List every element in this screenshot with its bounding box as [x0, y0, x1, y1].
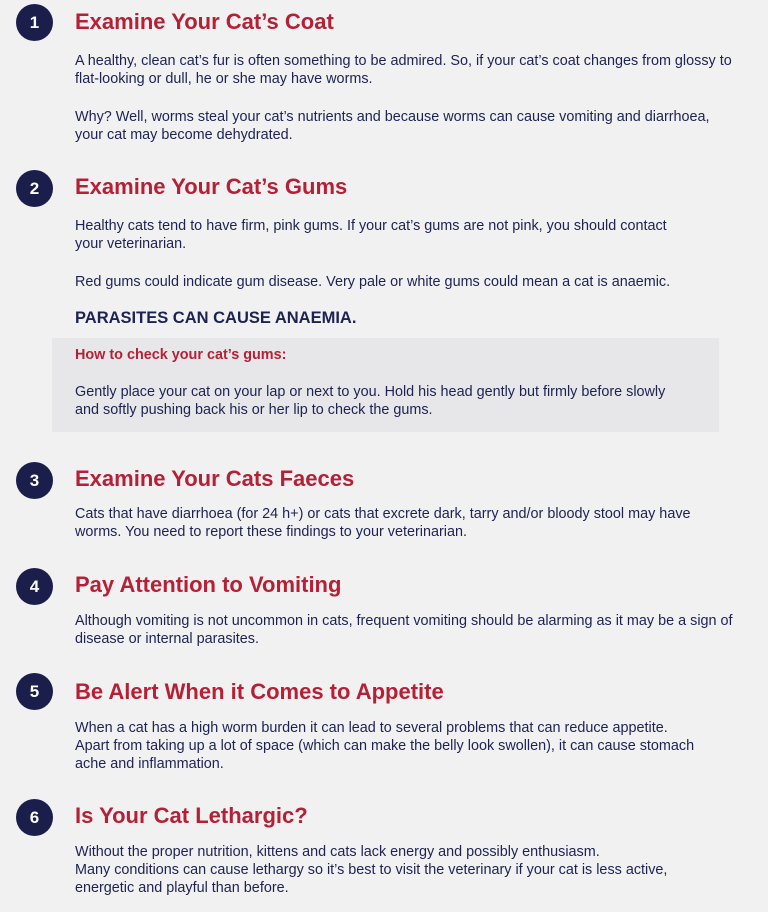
text 6: Many conditions can cause lethargy so it’s best to visit the veterinary if your cat is less active, [75, 862, 667, 878]
section 1 [16, 4, 732, 143]
text 1b: your cat may become dehydrated. [75, 127, 293, 143]
text 2b: Red gums could indicate gum disease. Very pale or white gums could mean a cat is anaemic. [75, 274, 670, 290]
icon: number 3 [16, 462, 53, 499]
icon: number 4: 4 [30, 577, 39, 596]
section 4 [16, 568, 733, 647]
heading 3: Examine Your Cats Faeces [75, 466, 354, 491]
icon: number 3: 3 [30, 471, 39, 490]
heading 6: Is Your Cat Lethargic? [75, 803, 308, 828]
text 2a [75, 218, 667, 252]
panel: how to check gums [52, 338, 719, 432]
box text [75, 384, 666, 418]
icon: number 5: 5 [30, 682, 39, 701]
icon: number 1 [16, 4, 53, 41]
text 3 [75, 506, 691, 540]
text 5 [75, 720, 694, 772]
icon: number 4 [16, 568, 53, 605]
box heading: How to check your cat’s gums: [75, 347, 286, 363]
icon: number 2: 2 [30, 179, 39, 198]
text 1a: A healthy, clean cat’s fur is often something to be admired. So, if your cat’s coat changes from glossy to [75, 53, 732, 69]
heading 5: Be Alert When it Comes to Appetite [75, 679, 444, 704]
icon: number 5 [16, 673, 53, 710]
text 1b: Why? Well, worms steal your cat’s nutrients and because worms can cause vomiting and diarrhoea, [75, 109, 710, 125]
text 2a: Healthy cats tend to have firm, pink gums. If your cat’s gums are not pink, you should contact [75, 218, 667, 234]
text 4: Although vomiting is not uncommon in cats, frequent vomiting should be alarming as it may be a sign of [75, 613, 733, 629]
section 5 [16, 673, 694, 772]
section 6 [16, 799, 667, 896]
text 4: disease or internal parasites. [75, 631, 259, 647]
icon: number 6 [16, 799, 53, 836]
text 1a [75, 53, 732, 87]
text 1b [75, 109, 710, 143]
section 2 [16, 170, 719, 432]
text 3: Cats that have diarrhoea (for 24 h+) or cats that excrete dark, tarry and/or bloody stool may have [75, 506, 691, 522]
box text: Gently place your cat on your lap or next to you. Hold his head gently but firmly before slowly [75, 384, 665, 400]
text 3: worms. You need to report these findings to your veterinarian. [75, 524, 467, 540]
text 4 [75, 613, 733, 647]
text 6: Without the proper nutrition, kittens and cats lack energy and possibly enthusiasm. [75, 844, 600, 860]
icon: number 2 [16, 170, 53, 207]
text 6: energetic and playful than before. [75, 880, 289, 896]
text 2a: your veterinarian. [75, 236, 186, 252]
box text: and softly pushing back his or her lip to check the gums. [75, 402, 433, 418]
heading 4: Pay Attention to Vomiting [75, 572, 341, 597]
text 5: Apart from taking up a lot of space (which can make the belly look swollen), it can cause stomach [75, 738, 694, 754]
text 6 [75, 844, 667, 896]
text 5: When a cat has a high worm burden it can lead to several problems that can reduce appetite. [75, 720, 668, 736]
section 3 [16, 462, 691, 540]
text 1a: flat-looking or dull, he or she may have worms. [75, 71, 373, 87]
heading 1: Examine Your Cat’s Coat [75, 9, 334, 34]
icon: number 1: 1 [30, 13, 39, 32]
text 5: ache and inflammation. [75, 756, 224, 772]
callout: parasites: PARASITES CAN CAUSE ANAEMIA. [75, 309, 356, 327]
icon: number 6: 6 [30, 808, 39, 827]
heading 2: Examine Your Cat’s Gums [75, 174, 347, 199]
